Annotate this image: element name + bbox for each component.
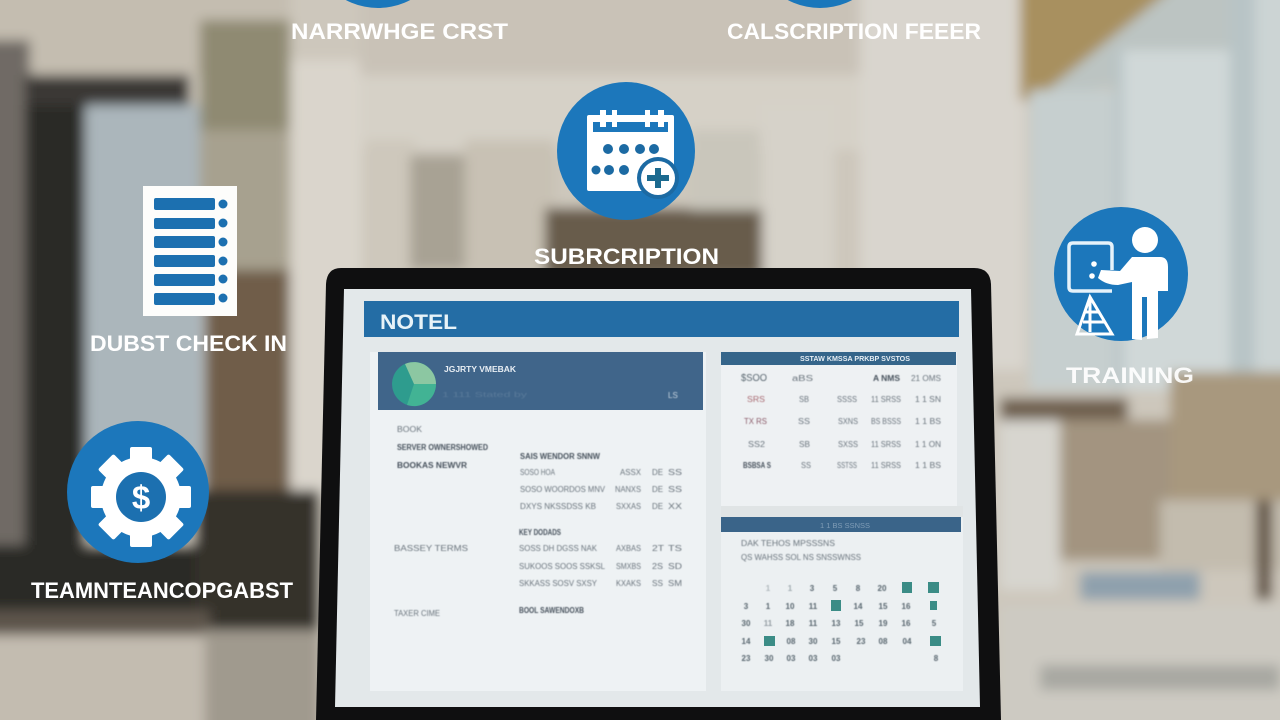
panel header [378,352,703,410]
booking text lines: SERVER OWNERSHOWED [397,443,488,452]
table rows: SS2 [748,440,766,449]
label: maintenance cost: TEAMNTEANCOPGABST [31,578,294,603]
booking text lines: TAXER CIME [394,609,440,618]
panel: left booking summary [370,352,706,691]
line items table: DXYS NKSSDSS KB [520,502,596,511]
calendar day numbers: 1 [788,584,793,593]
line items table: SXXAS [616,502,641,511]
app header bar [364,301,959,337]
calendar day numbers: 8 [856,584,861,593]
table rows: SS [801,461,811,470]
line items table: SS [668,485,682,494]
calendar notes: QS WAHSS SOL NS SNSSWNSS [741,553,861,562]
calendar day numbers: 08 [787,637,796,646]
panel: booking calendar [721,506,963,691]
panel: left booking summary: LS [668,391,678,400]
panel: left booking summary: 1 111 Stated by [442,392,528,399]
table rows: SS [798,417,810,426]
line items table: ASSX [620,468,642,477]
calendar day numbers: 5 [932,619,937,628]
panel: rates table [721,352,957,506]
line items table: SAIS WENDOR SNNW [520,452,600,461]
app header bar: NOTEL [380,311,457,334]
line items table: SOSS DH DGSS NAK [519,544,598,553]
line items table: NANXS [615,485,641,494]
calendar header [721,517,961,532]
line items table: AXBAS [616,544,641,553]
line items table: SS [652,579,663,588]
calendar day numbers: 23 [742,654,751,663]
laptop [316,268,1001,720]
icon: top right circle [751,0,889,8]
calendar day numbers: 03 [809,654,818,663]
icon: top left circle [309,0,447,8]
calendar notes: DAK TEHOS MPSSSNS [741,539,835,548]
booking text lines [394,425,488,618]
calendar day numbers: 30 [809,637,818,646]
line items table: DE [652,485,663,494]
calendar day numbers: 3 [810,584,815,593]
table rows: SB [799,395,809,404]
panel: left booking summary: JGJRTY VMEBAK [444,365,516,374]
icon: gear with dollar: $ [132,479,150,516]
booking text lines: BOOKAS NEWVR [397,461,467,470]
table rows: A NMS [873,374,901,383]
donut chart [392,362,436,406]
panel: booking calendar: 1 1 BS SSNSS [820,523,870,530]
icon: trainer at board [1054,207,1188,341]
highlighted calendar days [764,582,941,646]
line items table: DE [652,502,663,511]
calendar day numbers: 15 [832,637,841,646]
table rows: SXNS [838,417,858,426]
icon: gear with dollar [67,421,209,563]
label: guest check in: DUBST CHECK IN [90,331,287,356]
panel: rates table: SSTAW KMSSA PRKBP SVSTOS [800,356,910,363]
calendar day numbers: 14 [854,602,863,611]
line items table: SM [668,579,682,588]
laptop screen [335,289,980,707]
label: narrative cost: NARRWHGE CRST [291,19,509,44]
line items table: 2T [652,544,664,553]
calendar day numbers: 13 [832,619,841,628]
calendar day numbers: 19 [879,619,888,628]
calendar day numbers: 30 [765,654,774,663]
calendar day numbers: 23 [857,637,866,646]
calendar day numbers: 14 [742,637,751,646]
calendar day numbers: 11 [809,619,818,628]
calendar day numbers: 20 [878,584,887,593]
booking text lines: BASSEY TERMS [394,544,468,553]
icon: calendar subscription [557,82,695,220]
calendar day numbers: 8 [934,654,939,663]
line items table: KEY DODADS [519,528,562,537]
line items table: SOSO HOA [520,468,556,477]
table rows [741,373,941,470]
calendar day numbers: 11 [809,602,818,611]
line items table: DE [652,468,663,477]
line items table: 2S [652,562,663,571]
line items table: SKKASS SOSV SXSY [519,579,598,588]
icon: guest check-in list [143,186,237,316]
calendar day numbers: 3 [744,602,749,611]
table rows: SXSS [838,440,858,449]
calendar day numbers: 18 [786,619,795,628]
calendar day numbers: 08 [879,637,888,646]
calendar day numbers: 15 [855,619,864,628]
calendar day numbers: 16 [902,619,911,628]
table rows: 1 1 SN [915,395,941,404]
table rows: SSSS [837,395,857,404]
table rows: aBS [792,374,813,383]
line items table: SOSO WOORDOS MNV [520,485,606,494]
line items table [519,452,683,615]
laptop bezel [316,268,1001,720]
line items table: XX [668,502,683,511]
line items table: SMXBS [616,562,641,571]
label: subscription fee: CALSCRIPTION FEEER [727,19,981,44]
table rows: 1 1 ON [915,440,941,449]
table rows: 1 1 BS [915,417,941,426]
table rows: TX RS [744,417,767,426]
table rows: BSBSA S [743,461,772,470]
table rows: SRS [747,395,765,404]
line items table: SS [668,468,682,477]
label: subscription: SUBRCRIPTION [534,244,719,269]
line items table: TS [668,544,682,553]
line items table: SD [668,562,682,571]
table header [721,352,956,365]
line items table: KXAKS [616,579,641,588]
table rows: 11 SRSS [871,440,901,449]
table rows: $SOO [741,373,767,384]
calendar day numbers: 16 [902,602,911,611]
calendar day numbers: 30 [742,619,751,628]
table rows: 21 OMS [911,374,941,383]
calendar day numbers: 15 [879,602,888,611]
table rows: SB [799,440,810,449]
calendar day numbers: 04 [903,637,912,646]
table rows: BS BSSS [871,417,901,426]
label: training: TRAINING [1066,363,1194,388]
table rows: 11 SRSS [871,395,901,404]
table rows: 11 SRSS [871,461,901,470]
calendar day numbers: 5 [833,584,838,593]
calendar day numbers: 1 [766,602,771,611]
table rows: SSTSS [837,461,857,470]
calendar day numbers: 1 [766,584,771,593]
calendar day numbers: 10 [786,602,795,611]
calendar day numbers [742,584,939,663]
calendar day numbers: 03 [787,654,796,663]
calendar day numbers: 03 [832,654,841,663]
booking text lines: BOOK [397,425,423,434]
line items table: SUKOOS SOOS SSKSL [519,562,606,571]
calendar day numbers: 11 [764,619,773,628]
table rows: 1 1 BS [915,461,941,470]
line items table: BOOL SAWENDOXB [519,606,584,615]
calendar notes [741,539,861,562]
